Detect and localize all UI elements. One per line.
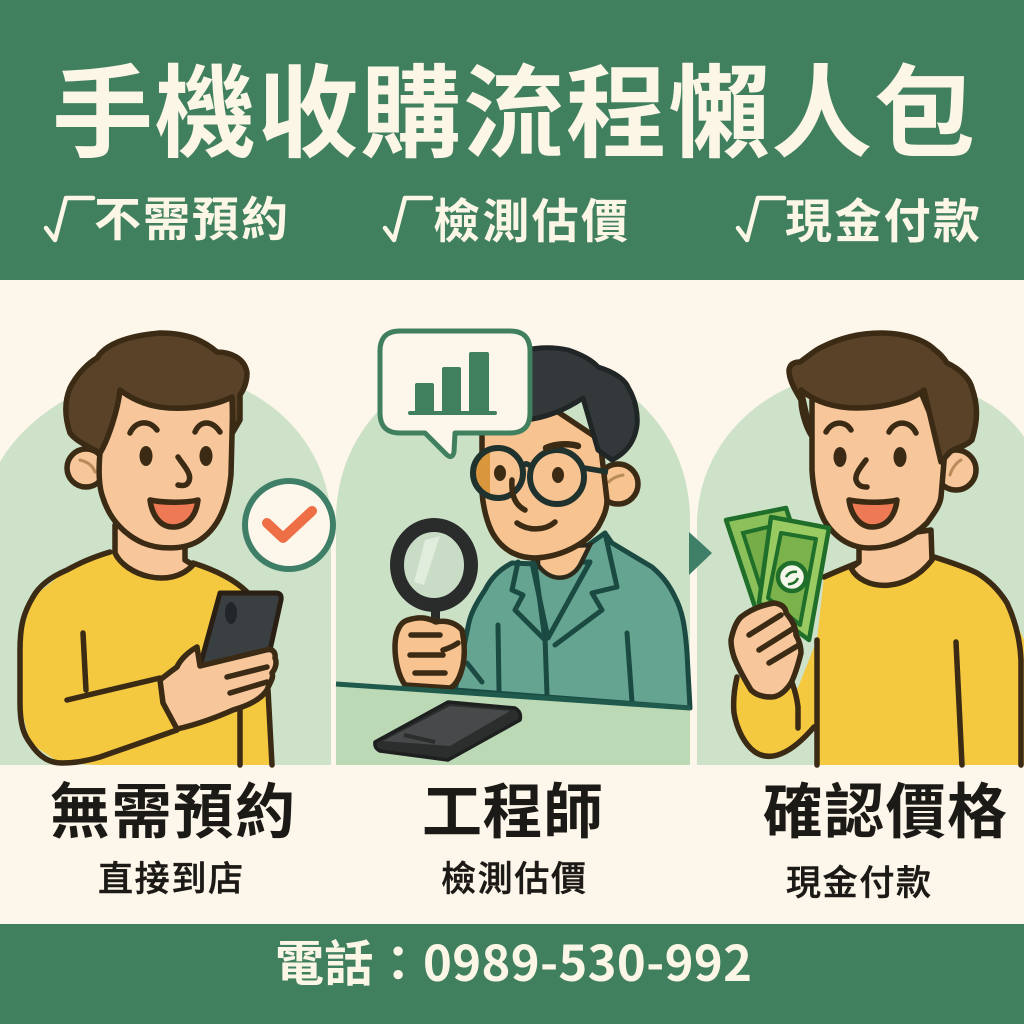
finger lines bbox=[749, 615, 799, 663]
panel: step 2 engineer inspecting bbox=[336, 331, 690, 765]
face bbox=[812, 390, 945, 548]
engineer face bbox=[482, 400, 607, 558]
coat lapels bbox=[467, 533, 632, 702]
hand holding magnifier bbox=[395, 618, 464, 688]
step 2 heading: 工程師 bbox=[422, 764, 603, 851]
engineer coat bbox=[455, 533, 690, 708]
engineer neck bbox=[538, 545, 590, 578]
step 3 label bbox=[763, 764, 1007, 906]
bars bbox=[408, 352, 497, 415]
sweater torso bbox=[20, 552, 272, 765]
sweater bbox=[734, 557, 1024, 765]
title: 手機收購流程懶人包 bbox=[52, 33, 975, 179]
person: face bbox=[99, 388, 233, 548]
glasses bbox=[473, 448, 608, 504]
ear detail bbox=[950, 460, 961, 475]
step 2 subheading: 檢測估價 bbox=[441, 851, 586, 902]
arrow bbox=[689, 532, 712, 575]
finger lines bbox=[410, 635, 458, 673]
neck bbox=[851, 530, 932, 585]
engineer shirt bbox=[532, 562, 590, 638]
face details bbox=[130, 423, 220, 527]
hair bbox=[789, 333, 976, 462]
table bbox=[336, 684, 690, 765]
check badge bbox=[245, 481, 333, 569]
engineer face details bbox=[494, 444, 578, 529]
step 2 label bbox=[422, 764, 603, 902]
person: ear bbox=[67, 449, 105, 487]
phone bbox=[200, 593, 281, 666]
banknotes bbox=[726, 508, 829, 640]
benefit: no appointment: 不需預約 bbox=[94, 181, 288, 250]
sweater outline bbox=[734, 557, 1021, 765]
engineer ear bbox=[598, 464, 638, 504]
person: hair bbox=[66, 333, 247, 453]
person: neck bbox=[115, 525, 193, 578]
arch background bbox=[336, 355, 690, 765]
hand holding cash bbox=[731, 603, 801, 697]
panel: step 1 customer with phone bbox=[0, 333, 333, 765]
arch background bbox=[697, 372, 1024, 765]
engineer hair bbox=[525, 348, 637, 460]
header band bbox=[0, 0, 1024, 280]
ear detail bbox=[609, 475, 623, 482]
magnifying glass bbox=[397, 525, 471, 628]
footer band bbox=[0, 924, 1024, 1024]
benefit: inspection and estimate: 檢測估價 bbox=[433, 183, 628, 252]
ear detail bbox=[80, 460, 95, 472]
panel: step 3 customer with cash bbox=[697, 333, 1024, 765]
phone on table bbox=[375, 702, 520, 760]
hand bbox=[160, 647, 276, 729]
face details bbox=[826, 423, 916, 527]
step 1 heading: 無需預約 bbox=[50, 764, 295, 851]
sweater outline bbox=[20, 552, 272, 765]
ear bbox=[936, 450, 976, 490]
phone number: 電話：0989-530-992 bbox=[275, 925, 752, 996]
arch background bbox=[0, 372, 331, 765]
step 1 label bbox=[50, 764, 295, 902]
step 3 subheading: 現金付款 bbox=[786, 855, 931, 906]
speech bubble with bar chart bbox=[380, 331, 530, 457]
step 3 heading: 確認價格 bbox=[763, 764, 1007, 851]
step 1 subheading: 直接到店 bbox=[98, 851, 243, 902]
benefit: cash payment: 現金付款 bbox=[785, 183, 980, 252]
finger lines bbox=[227, 667, 267, 693]
